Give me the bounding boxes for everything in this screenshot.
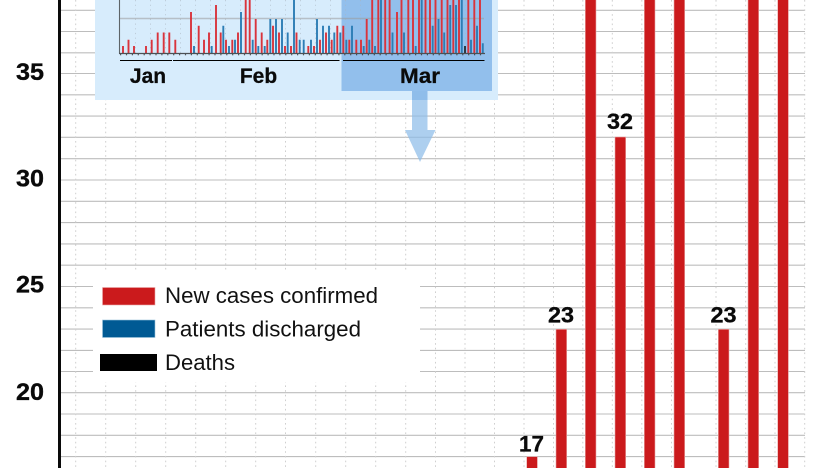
inset bars: new cases [123, 0, 480, 53]
y axis labels [16, 59, 44, 406]
inset bars: deaths [464, 46, 466, 53]
y axis labels: 20 [16, 379, 44, 406]
arrow stem overlap [412, 91, 428, 100]
legend [93, 272, 420, 382]
legend swatch: new cases [102, 288, 155, 305]
legend swatch: deaths [100, 354, 157, 371]
y axis labels: 35 [16, 59, 44, 86]
inset month labels: Feb [240, 65, 277, 88]
bar value labels: 17 [519, 432, 544, 457]
y axis [16, 0, 61, 468]
inset month labels: Mar [400, 65, 440, 88]
y axis labels: 30 [16, 166, 44, 193]
legend swatch: discharged [102, 320, 155, 338]
bar value labels: 23 [548, 303, 574, 328]
arrow: zoom from inset March [405, 91, 436, 162]
legend label: deaths: Deaths [165, 350, 235, 375]
panel: inset overview chart [95, 0, 498, 100]
panel: March highlight [342, 0, 492, 91]
inset month labels: Jan [130, 65, 166, 88]
inset month labels [130, 65, 440, 88]
legend label: new cases: New cases confirmed [165, 283, 378, 308]
inset month rules [120, 60, 484, 62]
bar value labels: 32 [607, 109, 633, 134]
bar value labels [519, 109, 736, 457]
legend label: discharged: Patients discharged [165, 317, 361, 342]
inset axes [119, 0, 485, 55]
y axis labels: 25 [16, 272, 44, 299]
bar value labels: 23 [710, 303, 736, 328]
inset bars: patients discharged [194, 0, 483, 53]
inset grid [120, 0, 484, 53]
bar chart: new cases confirmed [527, 0, 788, 468]
